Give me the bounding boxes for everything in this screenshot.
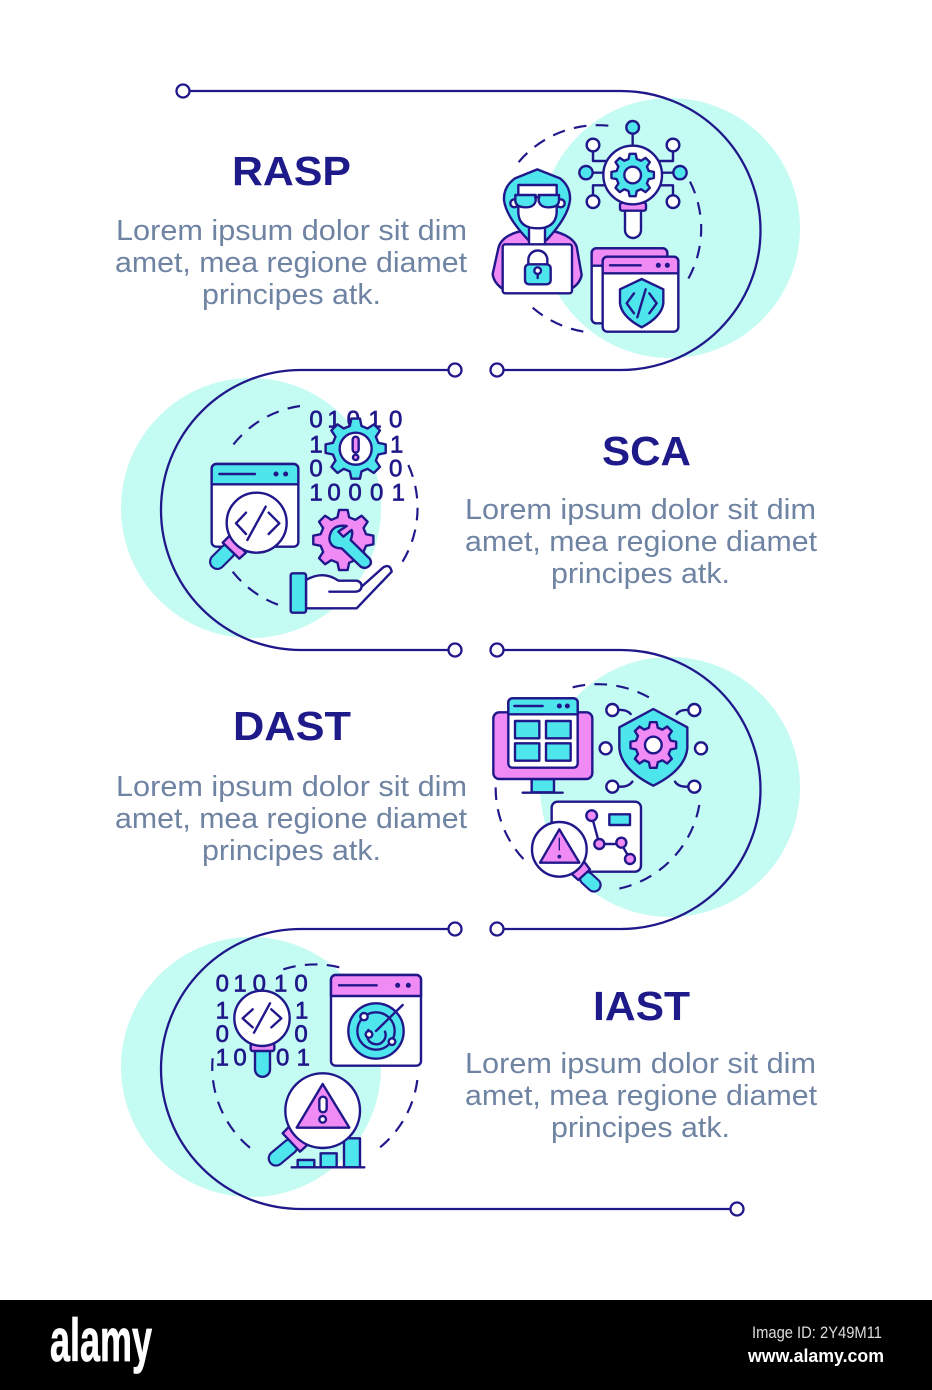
icon: binary gear alert, code window and wrench on hand: 0 [327, 480, 341, 507]
connector node left [448, 922, 462, 936]
connector line [504, 650, 760, 929]
heading: DAST: DAST [233, 703, 351, 749]
teal background circle [540, 98, 800, 358]
connector node right [490, 364, 504, 376]
connector line [161, 370, 448, 650]
icon: binary gear alert, code window and wrench on hand: 0 [309, 406, 323, 433]
text block: RASP description: Lorem ipsum dolor sit dim [116, 215, 467, 247]
icon: binary code magnifier, radar window and alert with bars: 1 [295, 997, 308, 1024]
icon: binary code magnifier, radar window and alert with bars: 1 [216, 1045, 229, 1072]
icon: binary code magnifier, radar window and alert with bars: 1 [233, 971, 247, 998]
icon: binary code magnifier, radar window and alert with bars: 1 [274, 971, 287, 998]
text block: IAST description: amet, mea regione diamet [465, 1080, 817, 1112]
icon: binary code magnifier, radar window and alert with bars: 1 [297, 1045, 310, 1072]
text block: SCA description: amet, mea regione diamet [465, 526, 817, 558]
text block: RASP description: principes atk. [202, 279, 381, 311]
icon: binary gear alert, code window and wrench on hand: 1 [309, 480, 323, 507]
teal background circle [121, 378, 381, 638]
text block: DAST description: principes atk. [202, 835, 381, 867]
footer logo: alamy: alamy [50, 1307, 152, 1374]
text block: SCA description: principes atk. [551, 558, 730, 590]
teal background circle [540, 657, 800, 917]
text block: DAST description: Lorem ipsum dolor sit dim [116, 771, 467, 803]
panel: IAST [121, 922, 817, 1216]
teal background circle [121, 937, 381, 1197]
end node [730, 1202, 744, 1216]
icon: binary gear alert, code window and wrench on hand [212, 406, 418, 613]
icon: binary code magnifier, radar window and alert with bars: 0 [216, 1021, 229, 1048]
text block: RASP description [115, 215, 467, 311]
icon: binary gear alert, code window and wrench on hand: 0 [370, 480, 383, 507]
connector line [161, 929, 730, 1209]
icon: binary gear alert, code window and wrench on hand: 0 [389, 456, 402, 483]
panel: SCA [121, 364, 817, 656]
start node [176, 84, 190, 98]
icon: binary gear alert, code window and wrench on hand: 0 [309, 456, 323, 483]
icon: binary code magnifier, radar window and alert with bars: 1 [216, 997, 229, 1024]
icon: binary code magnifier, radar window and alert with bars: 0 [216, 971, 229, 998]
text block: IAST description: Lorem ipsum dolor sit dim [465, 1048, 816, 1080]
connector line [190, 91, 760, 370]
icon: binary code magnifier, radar window and alert with bars [212, 964, 421, 1167]
heading: IAST: IAST [593, 983, 690, 1029]
text block: IAST description [465, 1048, 817, 1144]
icon: monitor, shield gear and alert magnifier [493, 684, 707, 890]
connector node left top [448, 364, 462, 376]
icon: binary code magnifier, radar window and alert with bars: 0 [294, 971, 308, 998]
icon: binary gear alert, code window and wrench on hand: 1 [368, 406, 382, 433]
connector node right bottom [490, 922, 504, 936]
text block: RASP description: amet, mea regione diamet [115, 247, 467, 279]
icon: binary code magnifier, radar window and alert with bars: 0 [253, 971, 266, 998]
footer bar [0, 1300, 932, 1390]
icon: binary code magnifier, radar window and alert with bars: 0 [276, 1045, 289, 1072]
icon: binary gear alert, code window and wrench on hand: 1 [309, 432, 323, 459]
icon: binary gear alert, code window and wrench on hand: 0 [389, 406, 402, 433]
icon: binary code magnifier, radar window and alert with bars: 0 [233, 1045, 247, 1072]
icon: hacker, gear magnifier and secure code window [493, 121, 701, 332]
image id: Image ID: 2Y49M11 [752, 1323, 882, 1342]
icon: binary gear alert, code window and wrench on hand: 1 [390, 432, 403, 459]
icon: binary gear alert, code window and wrench on hand: 0 [348, 480, 362, 507]
panel: DAST [115, 644, 800, 936]
panel: RASP [115, 84, 800, 376]
text block: SCA description [465, 494, 817, 590]
icon: binary gear alert, code window and wrench on hand: 1 [392, 480, 405, 507]
connector node left bottom [448, 644, 462, 656]
heading: RASP: RASP [232, 148, 351, 194]
icon: binary gear alert, code window and wrench on hand: 1 [327, 406, 341, 433]
text block: IAST description: principes atk. [551, 1112, 730, 1144]
website: www.alamy.com [747, 1346, 884, 1366]
heading: SCA: SCA [602, 428, 691, 474]
text block: DAST description [115, 771, 467, 867]
icon: binary gear alert, code window and wrench on hand: 0 [347, 406, 360, 433]
text block: SCA description: Lorem ipsum dolor sit dim [465, 494, 816, 526]
icon: binary code magnifier, radar window and alert with bars: 0 [294, 1021, 308, 1048]
connector node right top [490, 644, 504, 656]
text block: DAST description: amet, mea regione diamet [115, 803, 467, 835]
